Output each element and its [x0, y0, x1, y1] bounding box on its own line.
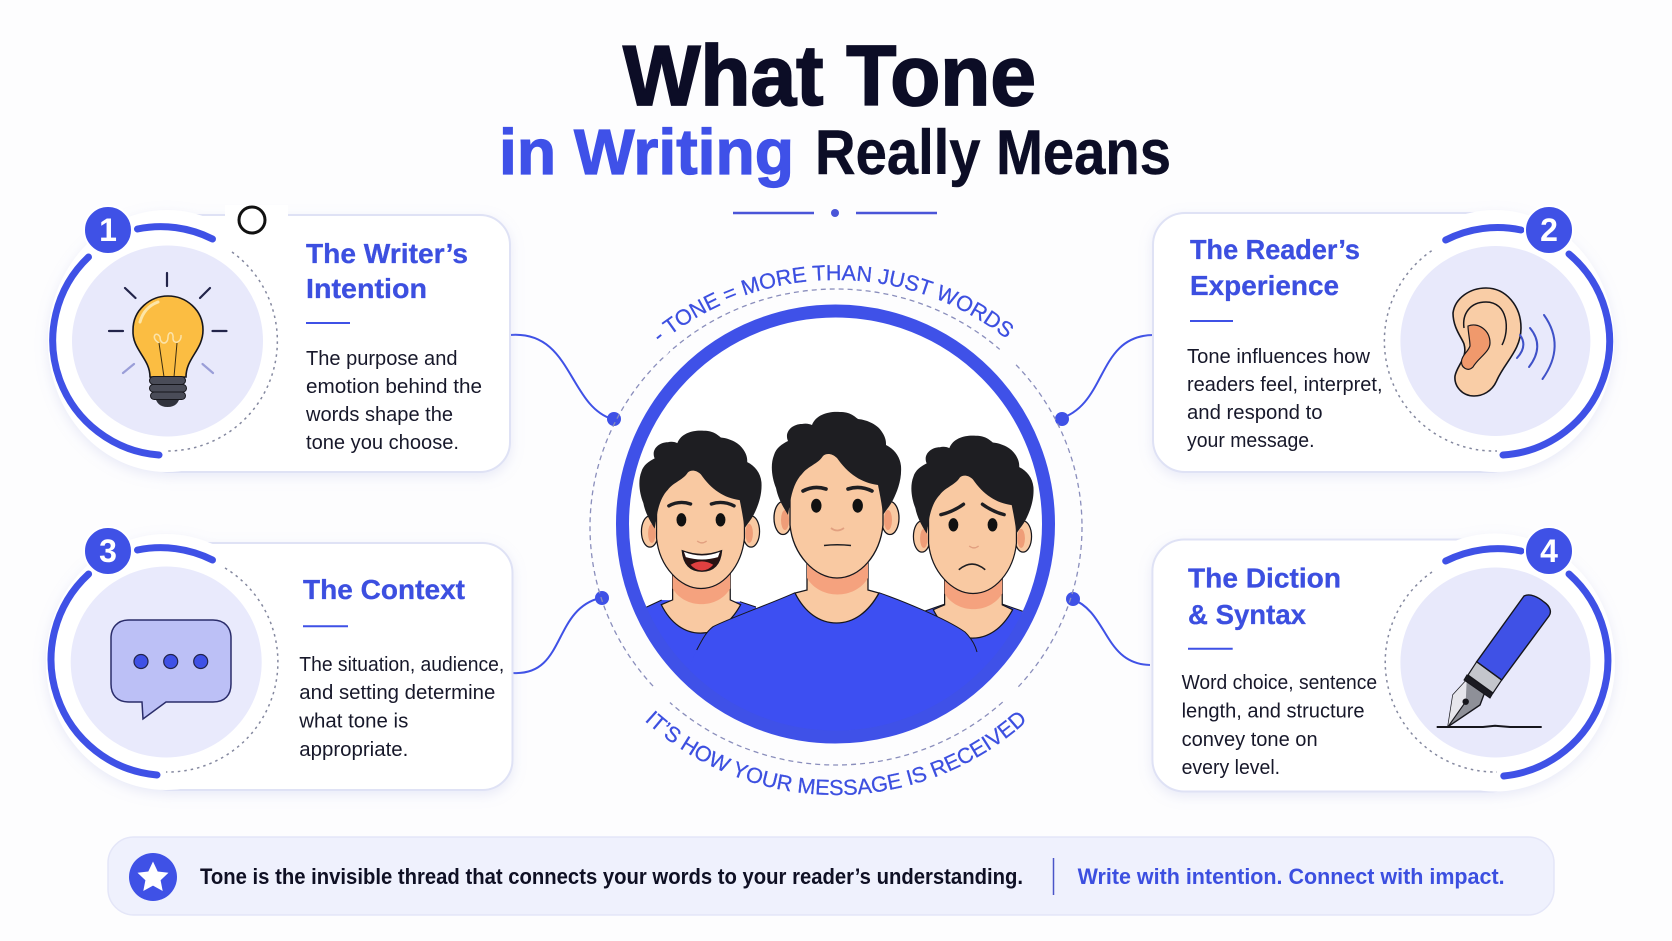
- heading: [1188, 562, 1341, 630]
- footer call to action: Write with intention. Connect with impact.: [1078, 864, 1505, 889]
- body text: The situation, audience,: [299, 654, 504, 676]
- heading: Experience: [1190, 270, 1339, 301]
- title line 2: Really Means: [815, 118, 1171, 188]
- body text: and setting determine: [299, 682, 495, 704]
- blue ring: [622, 311, 1048, 737]
- connector: diction to center: [1066, 592, 1150, 665]
- heading: The Context: [303, 574, 465, 605]
- card background: [1152, 534, 1615, 792]
- title line 1: What Tone: [623, 29, 1036, 124]
- body text: tone you choose.: [306, 432, 459, 454]
- number badge 4: [1525, 527, 1573, 575]
- number badge 1: 1: [99, 212, 117, 248]
- heading: [306, 238, 468, 304]
- progress ring: [1384, 228, 1610, 455]
- heading: & Syntax: [1188, 599, 1306, 630]
- heading: Intention: [306, 273, 427, 304]
- heading: The Diction: [1188, 562, 1341, 594]
- icon: fountain pen: [1437, 595, 1550, 727]
- progress ring: [1385, 549, 1608, 776]
- body text: appropriate.: [299, 739, 408, 761]
- body text: words shape the: [305, 404, 453, 426]
- person: neutral, center: [696, 412, 978, 730]
- body text: The purpose and: [306, 348, 458, 370]
- heading: The Reader’s: [1190, 234, 1360, 265]
- body text: Tone influences how: [1187, 346, 1371, 368]
- number badge 1: [84, 206, 132, 254]
- panel: the reader's experience: [1153, 206, 1614, 472]
- icon circle: [71, 566, 262, 758]
- number badge 4: 4: [1540, 533, 1558, 569]
- panel: the writer's intention: [48, 205, 510, 472]
- body text: your message.: [1187, 430, 1314, 452]
- number badge 3: 3: [99, 533, 117, 569]
- number badge 3: [84, 527, 132, 575]
- body text: [298, 654, 504, 761]
- progress ring: [53, 227, 277, 455]
- body text: every level.: [1182, 757, 1280, 779]
- body text: convey tone on: [1182, 729, 1318, 751]
- number badge 2: [1525, 206, 1573, 254]
- title line 2 accent: in Writing: [499, 116, 794, 188]
- title divider: [733, 209, 937, 217]
- body text: Word choice, sentence: [1182, 672, 1377, 694]
- icon circle: [1400, 568, 1590, 758]
- body text: length, and structure: [1182, 700, 1365, 722]
- connector: reader's experience to center: [1055, 320, 1153, 426]
- curved text: bottom: IT’S HOW YOUR MESSAGE IS RECEIVED: [646, 710, 1024, 796]
- central emblem: [589, 265, 1083, 796]
- body text: what tone is: [298, 710, 408, 732]
- body text: emotion behind the: [306, 376, 482, 398]
- icon: speech bubble: [111, 620, 231, 719]
- title: [499, 29, 1171, 188]
- icon: star badge: [129, 853, 177, 901]
- card background: [46, 534, 512, 790]
- three faces: [600, 412, 1060, 780]
- heading: The Writer’s: [306, 238, 468, 269]
- body text: [305, 348, 482, 454]
- icon: ear with sound waves: [1453, 288, 1555, 396]
- progress ring: [51, 548, 278, 775]
- body text: [1187, 346, 1382, 452]
- connector: writer's intention to center: [510, 320, 621, 426]
- person: sad, right: [911, 436, 1034, 667]
- card background: [1153, 210, 1614, 472]
- panel: the diction and syntax: [1152, 527, 1615, 792]
- panel: the context: [46, 527, 512, 790]
- body text: [1182, 672, 1377, 779]
- icon circle: [1400, 246, 1590, 436]
- card background: [48, 210, 510, 472]
- icon circle: [72, 246, 263, 436]
- footer banner: [108, 837, 1554, 915]
- heading: [1190, 234, 1360, 301]
- decorative ring marker: [239, 207, 265, 233]
- icon: light bulb: [109, 273, 226, 407]
- body text: readers feel, interpret,: [1187, 374, 1382, 396]
- number badge 2: 2: [1540, 212, 1558, 248]
- curved text: top: - TONE = MORE THAN JUST WORDS: [656, 265, 1013, 340]
- dashed outer ring: [590, 289, 1082, 765]
- connector: context to center: [513, 591, 609, 673]
- person: happy, left: [639, 430, 762, 669]
- body text: and respond to: [1187, 402, 1322, 424]
- footer statement: Tone is the invisible thread that connects your words to your reader’s understanding.: [200, 864, 1023, 889]
